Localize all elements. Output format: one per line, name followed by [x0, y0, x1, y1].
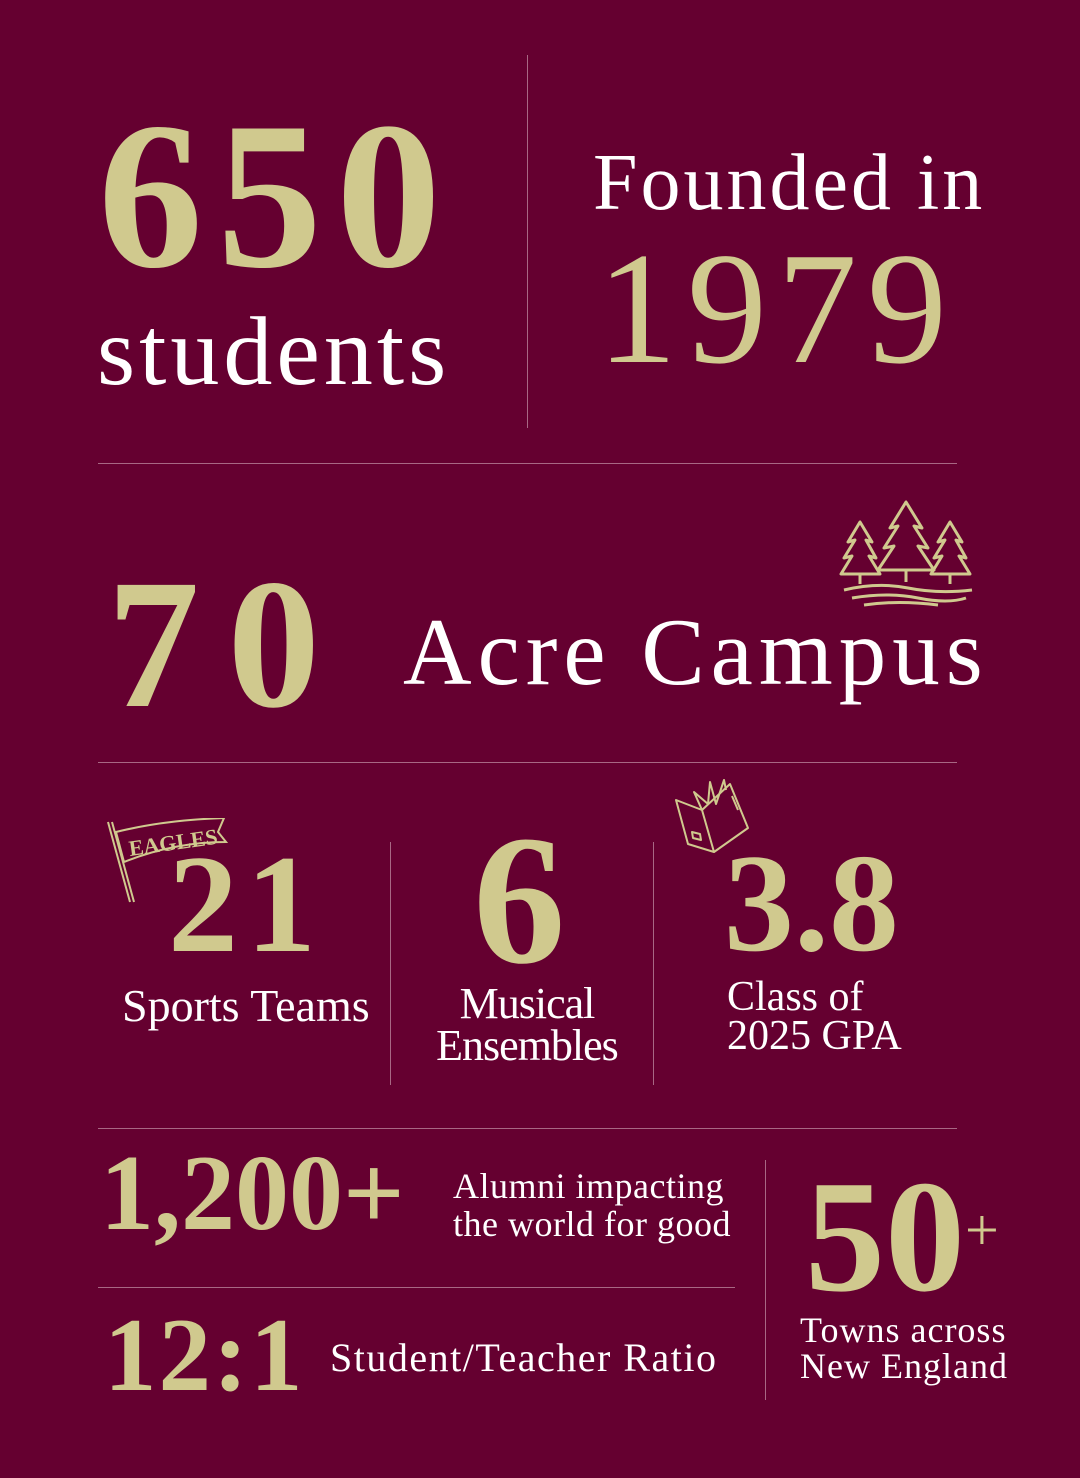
icon: eagles pennant: EAGLES	[127, 824, 219, 861]
label: Musical Ensembles: Musical Ensembles	[436, 979, 618, 1070]
stat: 21 sports teams: 21	[168, 827, 324, 982]
icon: eagles pennant	[107, 818, 228, 902]
label: alumni	[453, 1166, 731, 1244]
label: alumni: the world for good	[453, 1204, 731, 1244]
stat: 6: 6	[473, 798, 566, 1003]
label: Founded in: Founded in	[593, 139, 985, 227]
label: students: students	[97, 298, 450, 406]
stat: 70: 70	[107, 542, 348, 747]
label: alumni: Alumni impacting	[453, 1166, 724, 1206]
icon: book	[675, 779, 749, 853]
label: Class of 2025 GPA: Class of	[727, 974, 864, 1020]
label: ratio: Student/Teacher Ratio	[330, 1335, 717, 1380]
label: Acre Campus: Acre Campus	[403, 599, 989, 705]
stat: 3.8 GPA: 3.8	[724, 826, 899, 981]
label: towns	[800, 1310, 1008, 1386]
label: Class of 2025 GPA	[727, 974, 902, 1059]
label: towns: Towns across	[800, 1310, 1006, 1350]
label: Class of 2025 GPA: 2025 GPA	[727, 1013, 902, 1059]
label: Sports Teams: Sports Teams	[122, 980, 370, 1031]
label: towns: New England	[800, 1346, 1008, 1386]
stat: 50+: 50+	[805, 1147, 999, 1325]
stat: 12:1: 12:1	[104, 1296, 304, 1413]
stat: 1979: 1979	[597, 219, 957, 397]
stat: 650 students: 650	[98, 80, 455, 312]
icon: trees	[839, 500, 972, 606]
stat: 1,200+: 1,200+	[100, 1134, 405, 1253]
